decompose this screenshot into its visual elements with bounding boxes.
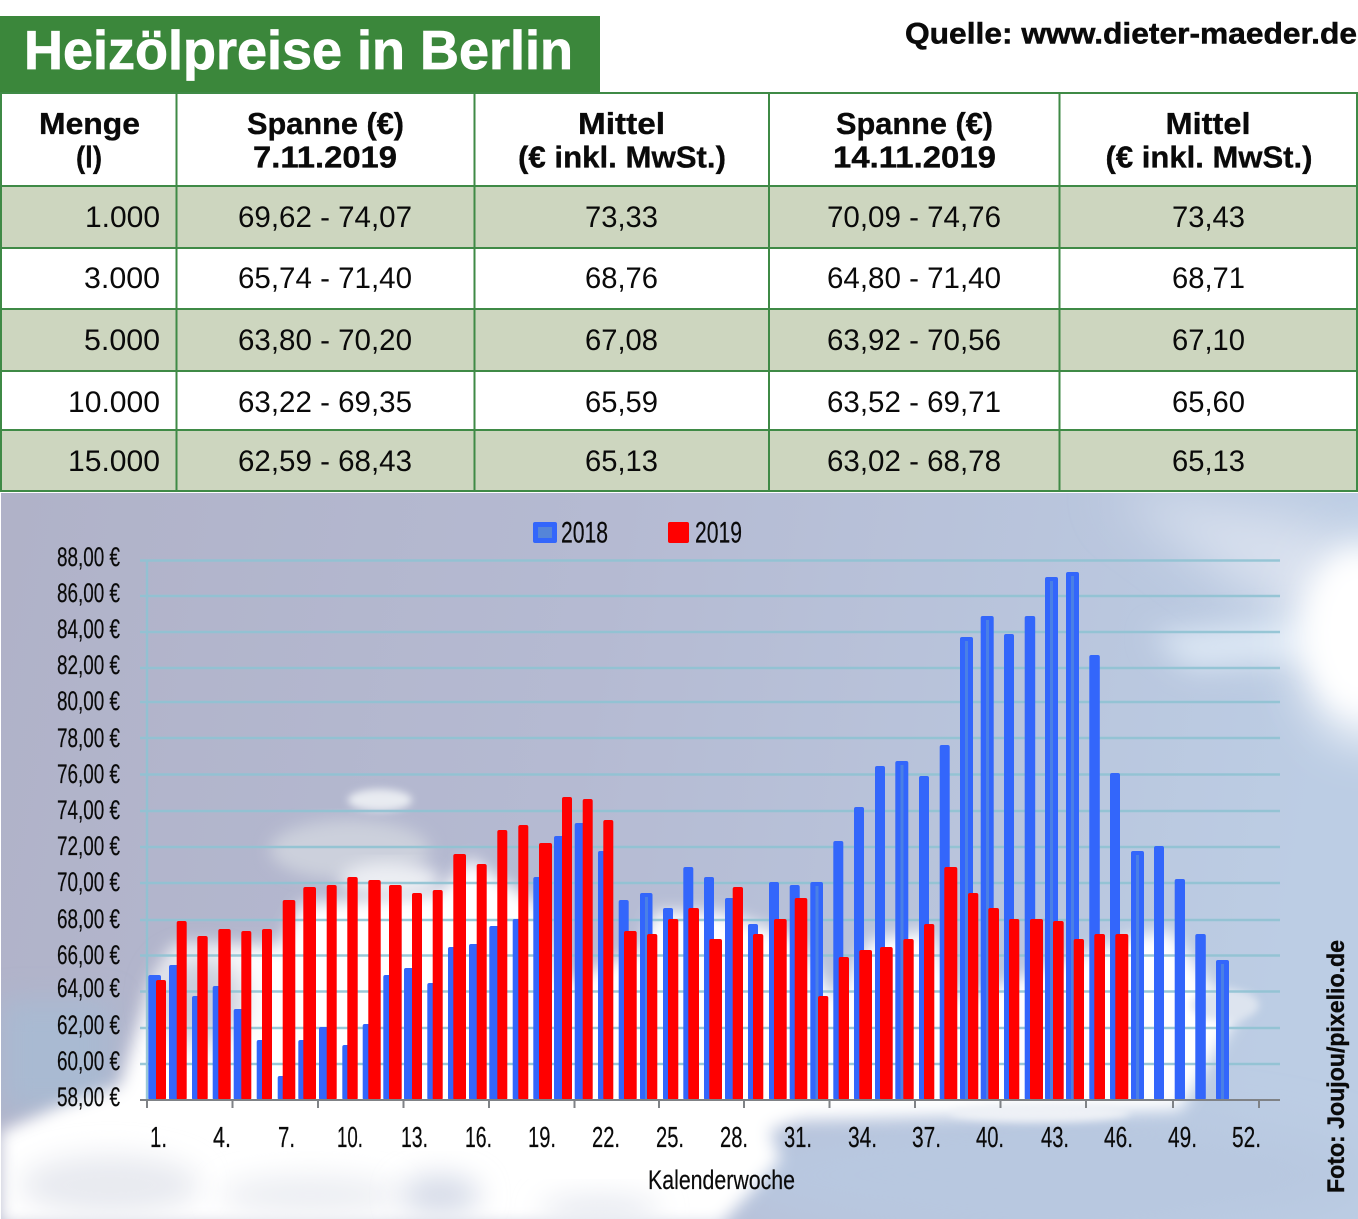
table row 10.000: 10.000 <box>68 386 160 419</box>
table row 10.000 <box>68 386 1245 419</box>
table row 5.000: 63,92 - 70,56 <box>827 324 1001 357</box>
photo credit: Foto: Joujou/pixelio.de <box>1323 940 1350 1193</box>
y axis labels: 88,00 € <box>57 542 120 572</box>
table header row: Spanne (€) <box>836 106 993 141</box>
x axis labels: 37. <box>912 1122 941 1154</box>
bars 2019 <box>156 797 1128 1100</box>
y axis labels: 64,00 € <box>57 973 120 1003</box>
table header row: 14.11.2019 <box>833 140 996 174</box>
table row 15.000: 15.000 <box>68 445 160 478</box>
sky background with clouds <box>0 490 1358 1219</box>
table row 1.000: 73,43 <box>1172 201 1245 234</box>
table row 5.000: 67,10 <box>1172 324 1245 357</box>
x axis labels: 40. <box>976 1122 1004 1154</box>
legend <box>533 517 742 550</box>
table row 1.000: 1.000 <box>85 201 160 234</box>
x axis labels: 22. <box>592 1122 620 1154</box>
title banner: Heizölpreise in Berlin <box>24 19 573 81</box>
table header row: (l) <box>76 140 102 174</box>
bars 2018 <box>148 572 1229 1100</box>
y axis labels: 66,00 € <box>57 940 120 970</box>
table row 3.000: 3.000 <box>84 262 160 295</box>
y axis labels <box>57 542 120 1112</box>
table row 10.000: 65,59 <box>585 386 658 419</box>
y axis labels: 78,00 € <box>57 723 120 753</box>
x axis labels: 16. <box>465 1122 492 1154</box>
y axis labels: 62,00 € <box>57 1010 120 1040</box>
table row 1.000: 70,09 - 74,76 <box>827 201 1001 234</box>
table row 3.000: 68,71 <box>1172 262 1245 295</box>
y axis labels: 82,00 € <box>57 650 120 680</box>
table row 5.000: 63,80 - 70,20 <box>238 324 412 357</box>
table header row: Spanne (€) <box>247 106 404 141</box>
y axis labels: 72,00 € <box>57 831 120 861</box>
x axis title: Kalenderwoche <box>648 1165 795 1195</box>
y axis labels: 74,00 € <box>57 795 120 825</box>
table row 10.000: 65,60 <box>1172 386 1245 419</box>
legend: 2018 <box>561 517 608 550</box>
y axis labels: 70,00 € <box>57 867 120 897</box>
x axis labels: 52. <box>1232 1122 1261 1154</box>
table row 3.000: 68,76 <box>585 262 658 295</box>
y axis labels: 76,00 € <box>57 759 120 789</box>
table header row: Mittel <box>1166 106 1250 141</box>
table row 1.000: 69,62 - 74,07 <box>238 201 412 234</box>
table row 10.000: 63,52 - 69,71 <box>827 386 1001 419</box>
x axis labels: 10. <box>337 1122 363 1154</box>
y axis labels: 86,00 € <box>57 578 120 608</box>
table row 1.000: 73,33 <box>585 201 658 234</box>
y axis labels: 58,00 € <box>57 1082 120 1112</box>
y axis labels: 84,00 € <box>57 614 120 644</box>
x axis labels: 7. <box>278 1122 295 1154</box>
y axis labels: 80,00 € <box>57 686 120 716</box>
x axis labels: 31. <box>784 1122 812 1154</box>
table header row: Menge <box>39 106 140 141</box>
x axis labels: 13. <box>401 1122 428 1154</box>
table row 3.000: 65,74 - 71,40 <box>238 262 412 295</box>
x axis labels: 1. <box>150 1122 167 1154</box>
table header row: Mittel <box>578 106 665 141</box>
table header row <box>39 106 1312 174</box>
x axis line and ticks <box>140 1100 1280 1108</box>
table header row: (€ inkl. MwSt.) <box>1106 140 1312 174</box>
table row 15.000 <box>68 445 1245 478</box>
table row 5.000 <box>84 324 1245 357</box>
x axis labels: 4. <box>213 1122 231 1154</box>
bar chart <box>57 517 1280 1195</box>
x axis labels: 25. <box>656 1122 684 1154</box>
y axis labels: 60,00 € <box>57 1046 120 1076</box>
table header row: (€ inkl. MwSt.) <box>518 140 726 174</box>
x axis labels: 49. <box>1168 1122 1197 1154</box>
table row 1.000 <box>85 201 1245 234</box>
source credit: Quelle: www.dieter-maeder.de <box>905 18 1357 50</box>
x axis labels: 46. <box>1104 1122 1133 1154</box>
price table <box>0 93 1358 492</box>
table row 3.000 <box>84 262 1245 295</box>
table row 15.000: 65,13 <box>1172 445 1245 478</box>
table row 3.000: 64,80 - 71,40 <box>827 262 1001 295</box>
x axis labels: 34. <box>848 1122 877 1154</box>
x axis labels: 43. <box>1041 1122 1069 1154</box>
table row 5.000: 5.000 <box>84 324 160 357</box>
table row 15.000: 62,59 - 68,43 <box>238 445 412 478</box>
x axis labels <box>150 1122 1261 1154</box>
table header row: 7.11.2019 <box>253 140 397 174</box>
legend: 2019 <box>695 517 742 550</box>
table row 10.000: 63,22 - 69,35 <box>238 386 412 419</box>
x axis labels: 28. <box>720 1122 748 1154</box>
table row 15.000: 65,13 <box>585 445 658 478</box>
x axis labels: 19. <box>528 1122 556 1154</box>
table row 5.000: 67,08 <box>585 324 658 357</box>
lighter stripes on wide 2018 bars <box>645 576 1224 1100</box>
y axis labels: 68,00 € <box>57 904 120 934</box>
table row 15.000: 63,02 - 68,78 <box>827 445 1001 478</box>
